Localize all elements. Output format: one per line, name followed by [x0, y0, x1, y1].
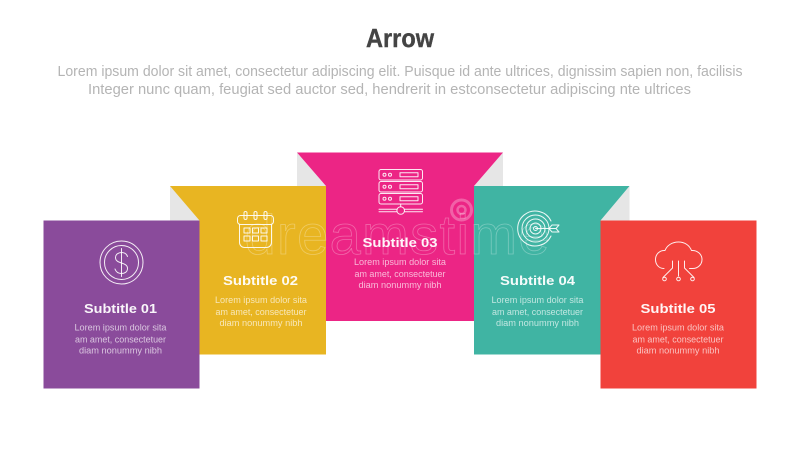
- body text 01: am amet, consectetuer: [75, 334, 166, 344]
- body text 04: Lorem ipsum dolor sita: [492, 295, 584, 305]
- body text 05: am amet, consectetuer: [632, 334, 724, 344]
- body text 03: [354, 257, 446, 290]
- body text 04: diam nonummy nibh: [496, 318, 579, 328]
- body text 03: am amet, consectetuer: [354, 269, 446, 279]
- intro text: Integer nunc quam, feugiat sed auctor sed, hendrerit in estconsectetur adipiscing nte ultrices: [88, 81, 691, 98]
- body text 03: Lorem ipsum dolor sita: [354, 257, 446, 267]
- body text 05: [632, 322, 724, 356]
- subtitle 04: Subtitle 04: [500, 273, 576, 288]
- intro text: Lorem ipsum dolor sit amet, consectetur adipiscing elit. Puisque id ante ultrices, dignissim sapien non, facilisis: [58, 63, 742, 80]
- icon: calendar: [238, 212, 274, 248]
- body text 05: diam nonummy nibh: [636, 346, 720, 356]
- watermark: dreamstime: [244, 203, 550, 266]
- body text 02: Lorem ipsum dolor sita: [215, 295, 307, 305]
- body text 05: Lorem ipsum dolor sita: [632, 322, 724, 332]
- panel: subtitle 02: [170, 186, 326, 354]
- icon: target with arrow: [518, 211, 559, 246]
- body text 01: [74, 322, 166, 356]
- body text 02: [215, 295, 307, 328]
- body text 01: diam nonummy nibh: [79, 346, 162, 356]
- subtitle 01: Subtitle 01: [84, 301, 157, 316]
- body text 02: diam nonummy nibh: [220, 318, 302, 328]
- title: Arrow: [366, 23, 435, 53]
- body text 02: am amet, consectetuer: [216, 307, 306, 317]
- fold shadows: [170, 152, 630, 220]
- body text 04: am amet, consectetuer: [492, 307, 583, 317]
- body text 04: [492, 295, 584, 328]
- panel: subtitle 05: [600, 220, 756, 388]
- subtitle 03: Subtitle 03: [362, 235, 438, 250]
- body text 01: Lorem ipsum dolor sita: [74, 322, 166, 332]
- icon: dollar coin: [100, 241, 143, 284]
- panel: subtitle 04: [474, 186, 630, 354]
- panel: subtitle 03: [297, 152, 503, 321]
- subtitle 05: Subtitle 05: [640, 301, 716, 316]
- icon: server: [379, 170, 422, 214]
- icon: cloud network: [656, 242, 702, 281]
- subtitle 02: Subtitle 02: [223, 273, 298, 288]
- panel: subtitle 01: [44, 220, 200, 388]
- body text 03: diam nonummy nibh: [358, 280, 442, 290]
- intro text: [58, 63, 742, 98]
